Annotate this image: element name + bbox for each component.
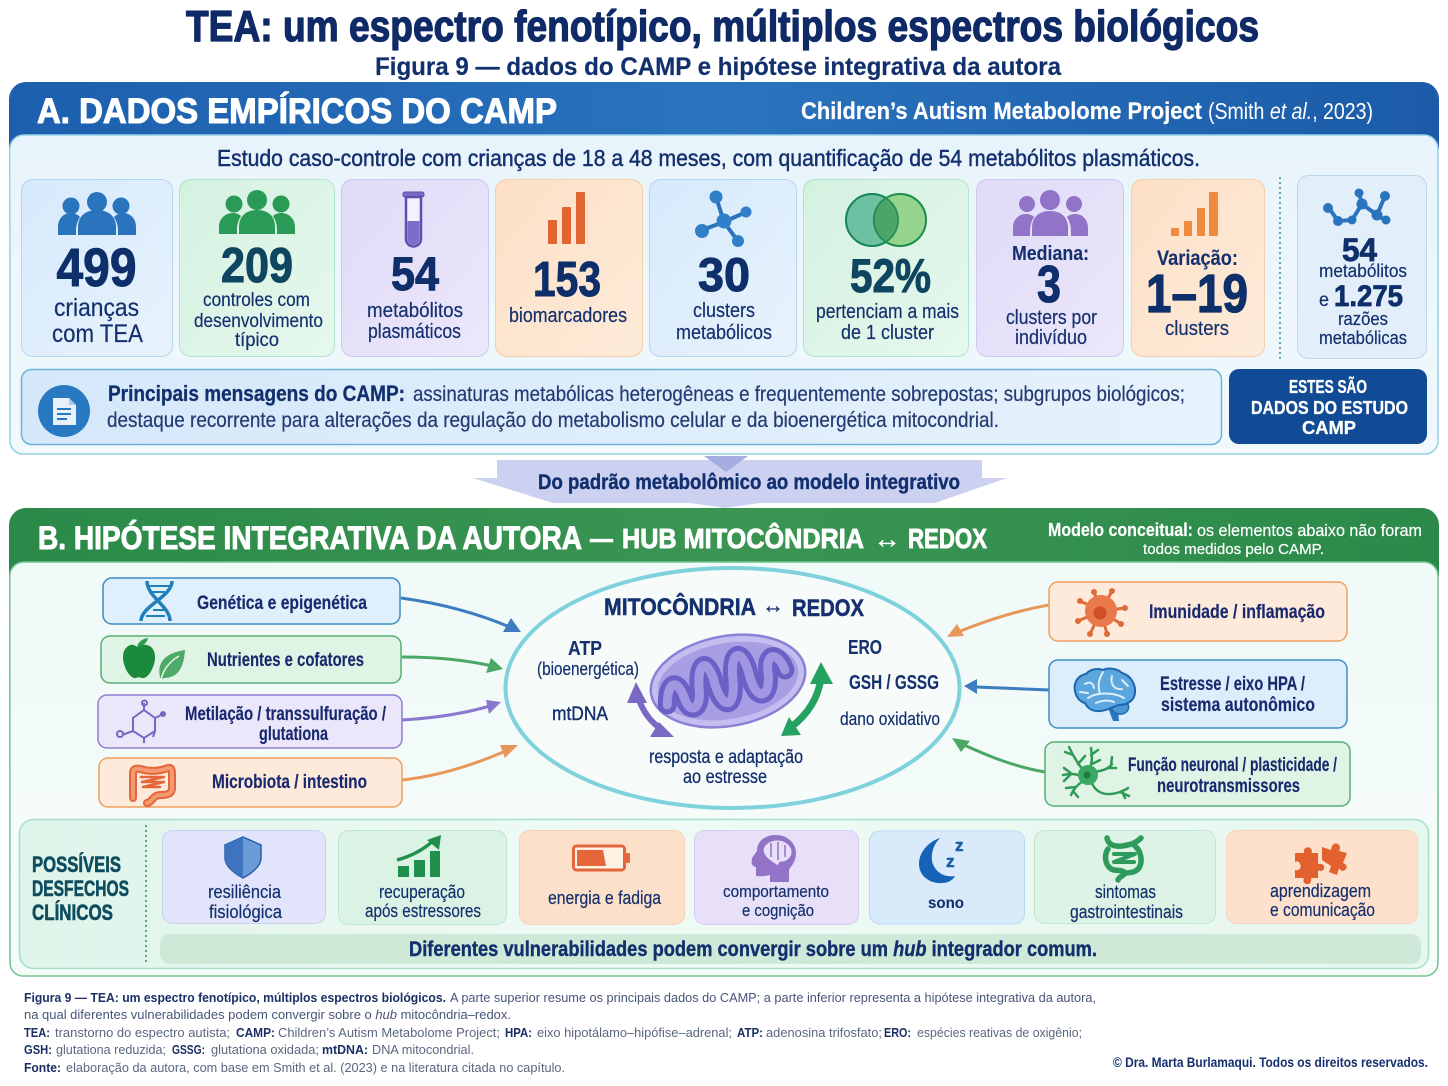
label [1070,882,1183,922]
card: mediana 3 [976,180,1124,356]
outcome: sono [870,831,1024,924]
icon: head with brain [752,835,796,882]
value 209: 209 [221,239,293,293]
factor: imunidade / inflamação [1049,582,1347,641]
label: resiliência [208,882,282,902]
panel A source: Children’s Autism Metabolome Project [801,98,1202,125]
panel A source: (Smith et al., 2023) [1208,98,1373,124]
outcome: aprendizagem e comunicação [1226,830,1418,924]
card: 54 metabólitos [342,180,488,356]
label razões metabólicas: metabólicas [1319,328,1407,348]
caption: TEA: [24,1025,50,1040]
caption: GSH: [24,1042,52,1057]
icon: people green [219,190,295,234]
icon: moon and z: z [955,836,964,855]
label pertenciam: pertenciam a mais [816,301,959,323]
hub title [604,592,864,622]
icon: test tube [403,192,424,247]
label: após estressores [365,901,481,921]
callout: estes são dados do estudo CAMP: ESTES SÃO [1289,376,1367,397]
card: 153 biomarcadores [496,180,642,356]
label: Metilação / transsulfuração / [185,704,387,725]
label: energia e fadiga [548,888,662,908]
label variação: Variação: [1157,247,1238,270]
outcome: sintomas gastrointestinais [1034,830,1216,924]
label biomarcadores: biomarcadores [509,305,627,327]
caption: glutationa oxidada; [211,1042,319,1057]
icon: neuron [1063,747,1129,798]
arrow: metilação to hub [402,700,501,720]
label crianças com TEA [52,294,143,348]
outcomes heading: CLÍNICOS [32,900,113,925]
hub bottom label: ao estresse [683,767,767,788]
arrow: green double [781,662,833,736]
label clusters por indivíduo [1006,307,1097,349]
caption: adenosina trifosfato; [766,1025,882,1040]
panel B note: todos medidos pelo CAMP. [1143,541,1324,558]
card: 499 crianças [22,180,172,356]
outcome: resiliência fisiológica [162,830,326,924]
message text: destaque recorrente para alterações da regulação do metabolismo celular e da bioenergética mitocondrial. [107,409,999,432]
hub title: ↔ [762,592,784,619]
icon: puzzle pieces [1295,843,1347,884]
arrow: purple double [627,682,674,737]
icon: document [38,385,90,437]
icon: rising bars [1171,192,1218,236]
value 1–19: 1–19 [1146,264,1248,324]
hub right labels: ERO [848,637,882,659]
caption: GSSG: [172,1042,205,1057]
caption [24,990,1096,1075]
hub left labels: ATP [568,638,602,660]
subtitle: Figura 9 — dados do CAMP e hipótese integrativa da autora [375,53,1062,81]
caption: glutationa reduzida; [56,1042,166,1057]
label [1128,755,1338,797]
icon: apple and leaf [123,638,185,680]
label metabólitos: metabólitos [1319,261,1407,281]
label clusters metabólicos [676,300,772,344]
value e 1.275: e [1319,290,1329,311]
value e 1.275: 1.275 [1334,280,1403,313]
label [365,882,481,921]
title: TEA: um espectro fenotípico, múltiplos espectros biológicos [186,2,1259,51]
icon: network [695,190,752,247]
icon: growth chart [397,835,441,877]
outcomes heading: DESFECHOS [32,876,129,901]
hub right labels: GSH / GSSG [849,672,939,694]
icon: intestine [133,768,172,803]
connectors: factor arrows [401,598,1049,780]
icon: battery [574,846,630,870]
caption: CAMP: [236,1025,275,1040]
label: Genética e epigenética [197,593,367,614]
icon: brain [1075,669,1135,721]
message bar [160,934,1421,964]
caption: eixo hipotálamo–hipófise–adrenal; [537,1025,732,1040]
label: sono [928,895,964,912]
label: Função neuronal / plasticidade / [1128,755,1338,776]
value 3: 3 [1037,256,1061,314]
hub bottom label [649,747,803,788]
hub title: REDOX [792,595,864,622]
label clusters metabólicos: clusters [693,300,755,322]
label: neurotransmissores [1157,776,1300,797]
arrow: função neuronal to hub [952,738,1045,772]
icon: molecule [117,700,165,743]
label: sintomas [1095,882,1156,902]
callout: estes são dados do estudo CAMP [1229,369,1427,444]
outcome: comportamento e cognição [694,830,858,924]
label: glutationa [259,724,328,745]
message bar: Diferentes vulnerabilidades podem convergir sobre um hub integrador comum. [409,938,1097,961]
value 54: 54 [391,247,439,300]
value 54 small: 54 [1342,232,1377,268]
hub: mitocôndria redox [506,568,960,808]
caption: transtorno do espectro autista; [55,1025,230,1040]
message text [107,381,1185,432]
icon: immune cell [1075,588,1128,637]
callout: estes são dados do estudo CAMP: DADOS DO ESTUDO [1251,398,1408,418]
card: 52% [804,180,968,356]
label [208,882,283,922]
caption: ATP: [737,1025,763,1040]
label controles: controles com [203,290,310,311]
message text: Principais mensagens do CAMP: [108,381,405,406]
caption: espécies reativas de oxigênio; [917,1025,1082,1040]
icon: moon and z [919,836,964,883]
caption: elaboração da autora, com base em Smith et al. (2023) e na literatura citada no capítulo. [66,1060,565,1075]
hub left labels: mtDNA [552,704,608,725]
callout: estes são dados do estudo CAMP: CAMP [1302,418,1356,438]
outcomes heading: POSSÍVEIS [32,852,121,877]
hub left labels: (bioenergética) [537,659,639,679]
value 499: 499 [56,238,136,298]
caption: A parte superior resume os principais dados do CAMP; a parte inferior representa a hipótese integrativa da autora, [450,990,1096,1005]
label clusters por indivíduo: indivíduo [1015,327,1087,349]
arrow: do padrão metabolômico ao modelo integrativo: Do padrão metabolômico ao modelo integrativo [538,471,960,494]
label [1160,674,1315,716]
outcomes heading [32,852,129,925]
caption: na qual diferentes vulnerabilidades podem convergir sobre o hub mitocôndria–redox. [24,1007,511,1022]
card: 209 controles [180,180,334,356]
factor: microbiota / intestino [99,758,402,807]
panel B note: Modelo conceitual: [1048,520,1193,540]
label [1270,881,1375,920]
caption: DNA mitocondrial. [372,1042,474,1057]
label: Estresse / eixo HPA / [1160,674,1306,695]
label: comportamento [723,882,829,901]
panel B: hipótese integrativa [9,508,1439,976]
label metabólitos plasmáticos [367,300,463,343]
label: fisiológica [209,902,283,922]
label [185,704,387,745]
label clusters por indivíduo: clusters por [1006,307,1097,329]
label crianças com TEA: crianças [54,294,139,322]
panel B note: os elementos abaixo não foram [1197,521,1422,540]
card: variação 1–19 [1132,180,1264,356]
label: aprendizagem [1270,881,1371,901]
value 153: 153 [533,253,601,307]
label crianças com TEA: com TEA [52,320,143,348]
label controles: desenvolvimento [194,311,323,332]
label: e comunicação [1270,900,1375,920]
outcome: energia e fadiga [520,830,684,924]
factor: genética e epigenética [103,578,400,624]
caption: Children’s Autism Metabolome Project; [278,1025,500,1040]
card: 30 clusters [650,180,796,356]
caption: ERO: [884,1025,911,1040]
arrow: microbiota to hub [402,745,518,780]
value 52%: 52% [850,249,931,302]
label: gastrointestinais [1070,902,1183,922]
label: Microbiota / intestino [212,772,367,793]
callout: principais mensagens [22,370,1222,444]
icon: moon and z: z [946,852,954,871]
panel B heading: — [590,523,613,554]
label: e cognição [742,901,814,920]
icon: people purple [1013,190,1088,236]
label clusters: clusters [1165,318,1229,340]
caption: mtDNA: [322,1042,368,1057]
factor: função neuronal [1045,742,1350,806]
label clusters metabólicos: metabólicos [676,322,772,344]
value 30: 30 [698,248,750,301]
arrow: do padrão metabolômico ao modelo integrativo [473,456,1007,508]
panel A: dados empíricos do CAMP [9,82,1439,454]
factor: metilação [98,695,402,748]
study description: Estudo caso-controle com crianças de 18 a 48 meses, com quantificação de 54 metabólitos plasmáticos. [217,145,1200,171]
panel B heading: B. HIPÓTESE INTEGRATIVA DA AUTORA [38,520,582,556]
label controles [194,290,323,351]
arrow: estresse to hub [964,679,1049,694]
label razões metabólicas: razões [1338,309,1388,329]
outcome: recuperação após estressores [338,830,506,924]
label pertenciam: de 1 cluster [841,322,934,344]
label mediana: Mediana: [1012,243,1089,265]
panel B heading: REDOX [908,523,987,554]
icon: DNA [141,581,172,621]
icon: bars orange [548,192,585,244]
hub left labels [537,638,639,725]
label pertenciam [816,301,959,344]
label razões metabólicas [1319,309,1407,348]
arrow: genética to hub [401,598,521,632]
factor: estresse / eixo HPA [1049,660,1347,728]
label: recuperação [379,882,465,902]
panel B heading: HUB MITOCÔNDRIA [622,522,864,554]
card: 54 metabólitos e 1.275 razões [1298,176,1426,358]
hub right labels [840,637,940,729]
caption: HPA: [505,1025,532,1040]
arrow: nutrientes to hub [402,657,503,673]
message text: assinaturas metabólicas heterogêneas e frequentemente sobrepostas; subgrupos biológicos; [413,383,1185,406]
icon: molecule chain [1323,188,1390,226]
label: sistema autonômico [1161,695,1315,716]
label metabólitos plasmáticos: metabólitos [367,300,463,322]
panel: possíveis desfechos clínicos [20,820,1428,968]
panel B heading: ↔ [873,523,901,554]
factor: nutrientes e cofatores [101,636,401,683]
caption: Figura 9 — TEA: um espectro fenotípico, múltiplos espectros biológicos. [24,990,446,1005]
icon: venn diagram [846,194,926,246]
icon: mitochondrion [643,623,813,739]
panel B heading [38,520,987,556]
panel B note [1048,520,1422,558]
icon: people blue [58,192,136,235]
caption: Fonte: [24,1060,61,1075]
hub title: MITOCÔNDRIA [604,593,756,621]
label [723,882,829,920]
label metabólitos plasmáticos: plasmáticos [368,321,461,343]
icon: shield [225,837,261,878]
hub bottom label: resposta e adaptação [649,747,803,768]
label controles: típico [235,330,279,351]
label: Nutrientes e cofatores [207,650,364,671]
hub right labels: dano oxidativo [840,709,940,729]
arrow: imunidade to hub [947,605,1049,637]
icon: intestine green [1106,838,1141,880]
panel A heading: A. DADOS EMPÍRICOS DO CAMP [37,91,557,131]
label: Imunidade / inflamação [1149,602,1325,623]
